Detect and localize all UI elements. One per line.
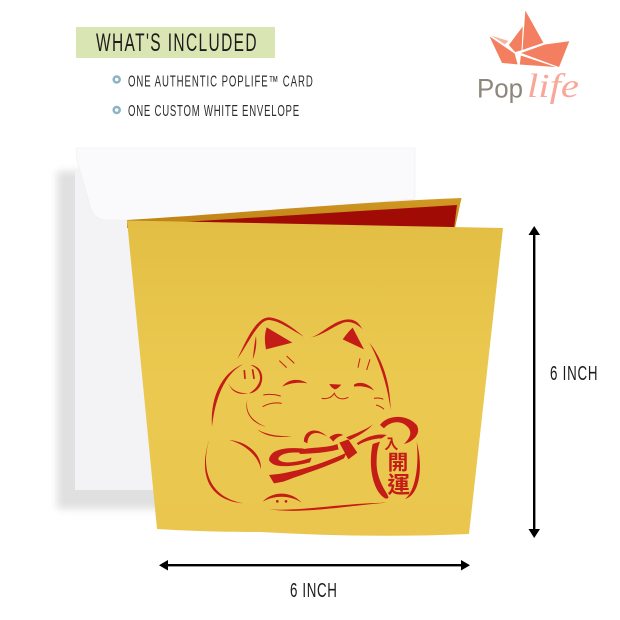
- list of included items: [114, 72, 313, 120]
- envelope body: [75, 170, 415, 490]
- cat ribbon and lucky bag: 運: [387, 467, 410, 500]
- cat cut-out illustration: [205, 317, 420, 511]
- wordmark: life: life: [527, 68, 579, 105]
- logo: poplife: [477, 9, 579, 105]
- cat head and ears: [237, 317, 391, 410]
- label: width 6 inch: 6 INCH: [290, 578, 337, 602]
- cat ribbon and lucky bag: 入: [384, 434, 398, 454]
- heading: what's included: WHAT'S INCLUDED: [96, 29, 257, 57]
- envelope with shadow: [57, 148, 415, 509]
- item: white envelope: ONE CUSTOM WHITE ENVELOPE: [128, 102, 299, 120]
- cat body: [205, 400, 387, 511]
- envelope shadow: [57, 171, 167, 509]
- cat raised paw: [212, 364, 262, 427]
- item: poplife card: ONE AUTHENTIC POPLIFE™ CARD: [128, 72, 313, 90]
- card: [127, 198, 503, 536]
- card back panel: [127, 198, 462, 228]
- arrow: vertical dimension: [528, 226, 540, 538]
- cat ribbon and lucky bag: [269, 417, 420, 500]
- cat ribbon and lucky bag: 開: [388, 445, 408, 475]
- icon: origami boat: [488, 9, 570, 68]
- cat face: [263, 356, 384, 409]
- card red interior: [183, 205, 457, 228]
- envelope flap: [76, 148, 415, 220]
- wordmark: Pop: Pop: [477, 74, 523, 104]
- label: height 6 inch: 6 INCH: [550, 361, 597, 385]
- card front panel: [127, 220, 503, 536]
- arrow: horizontal dimension: [159, 560, 470, 570]
